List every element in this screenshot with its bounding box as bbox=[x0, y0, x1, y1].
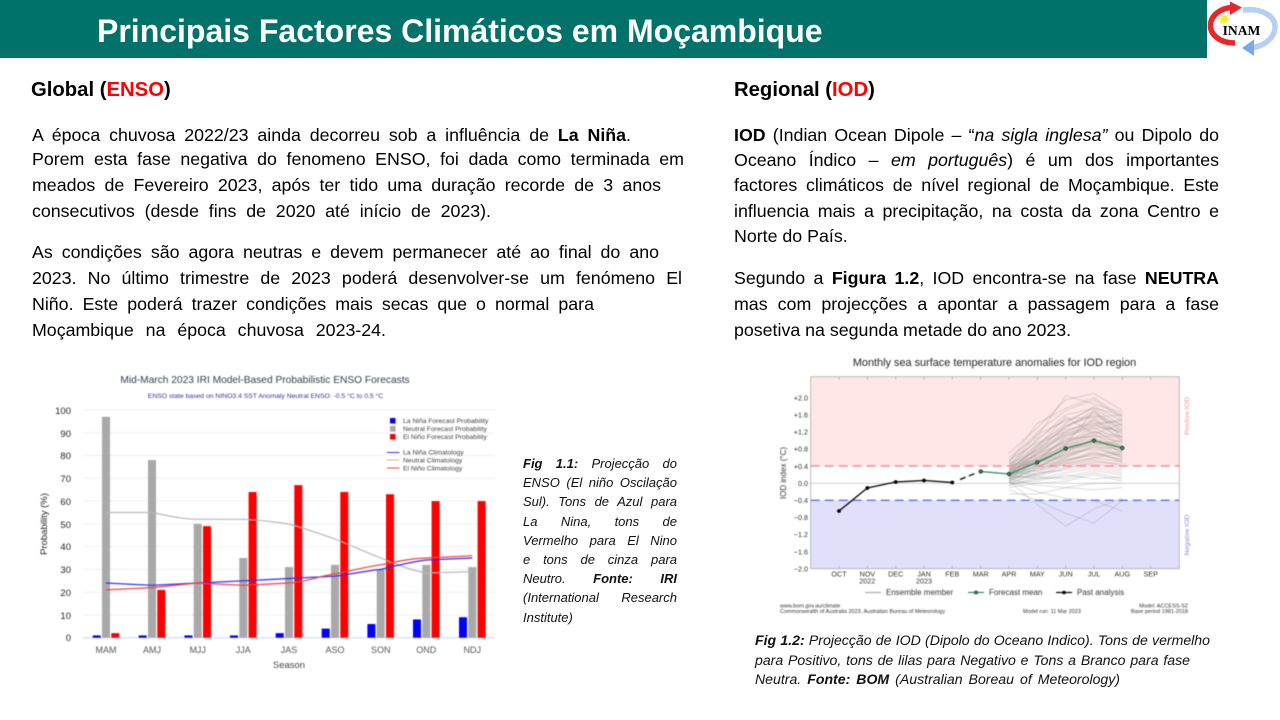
legend: La Niña Forecast Probability bbox=[403, 418, 489, 425]
legend bbox=[387, 418, 489, 472]
caption: Fig 1.1: Sul). Tons de Azul para bbox=[523, 494, 677, 509]
heading: Regional (IOD): Regional (IOD) bbox=[734, 79, 875, 101]
x axis labels: NOV bbox=[860, 570, 875, 578]
y axis labels: −1.2 bbox=[794, 530, 808, 539]
source notes: Base period 1981-2018 bbox=[1131, 609, 1188, 615]
y axis labels: 10 bbox=[60, 611, 71, 622]
x axis labels: AMJ bbox=[143, 645, 161, 655]
source notes: www.bom.gov.au/climate bbox=[779, 604, 840, 610]
legend: Neutral Climatology bbox=[403, 458, 463, 464]
y axis labels: 90 bbox=[60, 429, 71, 440]
x axis labels: AUG bbox=[1115, 570, 1130, 578]
icon: INAM logo: INAM bbox=[1223, 23, 1261, 38]
x axis labels: MJJ bbox=[189, 645, 206, 655]
x axis title: Season bbox=[273, 660, 305, 671]
caption: Fig 1.1: Neutro. Fonte: IRI bbox=[523, 571, 677, 586]
y axis labels: +1.2 bbox=[794, 428, 808, 437]
chart title: Mid-March 2023 IRI Model-Based Probabilistic ENSO Forecasts bbox=[120, 375, 410, 386]
legend: Ensemble member bbox=[886, 588, 953, 597]
legend: Forecast mean bbox=[989, 588, 1042, 597]
text block: ENSO paragraph 1: A época chuvosa 2022/23 ainda decorreu sob a influência de La Niña. bbox=[32, 125, 631, 145]
caption: Fig 1.1: (International Research bbox=[523, 590, 677, 605]
x axis labels: JJA bbox=[236, 645, 251, 655]
caption: Fig 1.1: ENSO (El niño Oscilação bbox=[523, 475, 677, 490]
legend bbox=[865, 588, 1124, 597]
x axis labels: NDJ bbox=[464, 645, 481, 655]
x axis labels: JAN bbox=[917, 570, 931, 578]
x axis labels bbox=[96, 645, 481, 655]
text block: ENSO paragraph 2: Niño. Este poderá trazer condições mais secas que o normal para bbox=[32, 294, 594, 314]
y axis labels: +1.6 bbox=[794, 410, 808, 420]
heading: Global (ENSO): Global (ENSO) bbox=[31, 79, 171, 101]
text block: IOD paragraph 1 bbox=[734, 125, 1219, 246]
y axis labels bbox=[794, 393, 808, 573]
caption: Fig 1.1 bbox=[523, 456, 678, 625]
y axis title: IOD index (°C) bbox=[779, 447, 788, 499]
y axis labels: 50 bbox=[60, 520, 71, 531]
source notes: Commonwealth of Australia 2023, Australian Bureau of Meteorology bbox=[780, 609, 945, 615]
caption: Fig 1.1: e tons de cinza para bbox=[523, 552, 677, 567]
text block: IOD paragraph 2: mas com projecções a apontar a passagem para a fase bbox=[734, 294, 1219, 314]
x axis labels: ASO bbox=[325, 645, 345, 655]
caption: Fig 1.1: Fig 1.1: Projecção do bbox=[523, 456, 677, 471]
past analysis line bbox=[837, 473, 976, 513]
y axis labels: 70 bbox=[60, 474, 71, 485]
source notes bbox=[779, 604, 1188, 615]
chart: IOD sea surface temperature anomalies: Negative IOD bbox=[1184, 515, 1191, 555]
y axis labels: −1.6 bbox=[794, 547, 808, 556]
text block: IOD paragraph 1: influencia mais a precipitação, na costa da zona Centro e bbox=[734, 201, 1219, 221]
text block: ENSO paragraph 1: consecutivos (desde fins de 2020 até início de 2023). bbox=[32, 201, 491, 221]
y axis labels: 40 bbox=[60, 542, 71, 553]
x axis labels: JAS bbox=[281, 645, 297, 655]
x axis labels: JUL bbox=[1088, 570, 1100, 578]
x axis labels: OND bbox=[416, 645, 437, 655]
y axis labels: 80 bbox=[60, 451, 71, 462]
x axis labels: MAM bbox=[96, 645, 116, 655]
text block: IOD paragraph 2: Segundo a Figura 1.2, IOD encontra-se na fase NEUTRA bbox=[734, 268, 1219, 288]
y axis title: Probability (%) bbox=[39, 493, 50, 555]
x axis labels: MAR bbox=[973, 570, 989, 578]
caption: Fig 1.1: Vermelho para El Nino bbox=[523, 533, 677, 548]
bars bbox=[93, 417, 486, 638]
y axis labels: 20 bbox=[60, 588, 71, 599]
y axis labels: −0.4 bbox=[794, 496, 808, 505]
caption: Fig 1.1: Institute) bbox=[523, 610, 573, 625]
x axis labels: OCT bbox=[831, 570, 847, 578]
text block: IOD paragraph 2 bbox=[734, 268, 1219, 340]
source notes: Model: ACCESS-S2 bbox=[1139, 604, 1188, 610]
legend: El Niño Climatology bbox=[403, 466, 463, 472]
negative IOD zone bbox=[811, 500, 1179, 569]
tick marks bbox=[839, 377, 1151, 569]
caption: Fig 1.1: La Nina, tons de bbox=[523, 514, 677, 529]
threshold lines bbox=[811, 465, 1179, 467]
y axis labels bbox=[55, 406, 71, 644]
text block: ENSO paragraph 1 bbox=[32, 125, 684, 221]
caption: Fig 1.2 bbox=[754, 632, 1210, 687]
text block: IOD paragraph 2: posetiva na segunda metade do ano 2023. bbox=[734, 320, 1071, 340]
climatology lines bbox=[106, 512, 472, 590]
y axis labels: 30 bbox=[60, 565, 71, 576]
y axis labels: +0.8 bbox=[794, 445, 808, 454]
y axis labels: 0 bbox=[66, 633, 71, 644]
x axis labels: DEC bbox=[888, 570, 903, 578]
caption: Fig 1.2: para Positivo, tons de lilas para Negativo e Tons a Branco para fase bbox=[755, 652, 1190, 668]
forecast mean line bbox=[979, 439, 1124, 476]
text block: ENSO paragraph 2: Moçambique na época chuvosa 2023-24. bbox=[32, 320, 386, 340]
text block: ENSO paragraph 1: Porem esta fase negativa do fenomeno ENSO, foi dada como terminada em bbox=[32, 149, 684, 169]
y axis labels: 60 bbox=[60, 497, 71, 508]
y axis labels: 0.0 bbox=[798, 479, 808, 488]
text block: IOD paragraph 1: Norte do País. bbox=[734, 226, 848, 246]
title: Principais Factores Climáticos em Moçambique bbox=[97, 13, 823, 49]
x axis labels: 2022 bbox=[859, 576, 875, 586]
text block: IOD paragraph 1: Oceano Índico – em português) é um dos importantes bbox=[734, 150, 1219, 170]
legend: Past analysis bbox=[1077, 588, 1124, 597]
x axis labels: SEP bbox=[1144, 570, 1158, 578]
zone labels: Positive IOD bbox=[1184, 397, 1191, 435]
x axis labels: 2023 bbox=[916, 576, 932, 586]
y axis labels: −0.8 bbox=[794, 513, 808, 522]
chart subtitle: ENSO state based on NINO3.4 SST Anomaly Neutral ENSO: -0.5 °C to 0.5 °C bbox=[148, 392, 383, 400]
positive IOD zone bbox=[811, 377, 1179, 466]
x axis labels: FEB bbox=[945, 570, 959, 578]
ensemble members bbox=[1009, 393, 1122, 526]
icon: INAM logo bbox=[1207, 0, 1280, 58]
text block: ENSO paragraph 2: 2023. No último trimestre de 2023 poderá desenvolver-se um fenómeno El bbox=[32, 268, 682, 288]
header band bbox=[0, 0, 1280, 58]
caption: Fig 1.2: Neutra. Fonte: BOM (Australian Boreau of Meteorology) bbox=[755, 671, 1120, 687]
source notes: Model run: 11 Mar 2023 bbox=[1023, 609, 1081, 615]
caption: Fig 1.2: Fig 1.2: Projecção de IOD (Dipolo do Oceano Indico). Tons de vermelho bbox=[755, 632, 1210, 648]
text block: ENSO paragraph 2 bbox=[32, 242, 682, 340]
text block: ENSO paragraph 1: meados de Fevereiro 2023, após ter tido uma duração recorde de 3 anos bbox=[32, 175, 661, 195]
legend: Neutral Forecast Probability bbox=[403, 426, 487, 433]
x axis labels: APR bbox=[1002, 570, 1016, 578]
y axis labels: −2.0 bbox=[794, 564, 808, 573]
y axis labels: +0.4 bbox=[794, 462, 808, 471]
x axis labels: JUN bbox=[1059, 570, 1073, 578]
y axis labels: 100 bbox=[55, 406, 71, 417]
y axis labels: +2.0 bbox=[794, 393, 808, 402]
x axis labels: MAY bbox=[1030, 570, 1045, 578]
text block: IOD paragraph 1: IOD (Indian Ocean Dipole – “na sigla inglesa” ou Dipolo do bbox=[734, 125, 1219, 145]
x axis labels: SON bbox=[371, 645, 390, 655]
chart title: Monthly sea surface temperature anomalies for IOD region bbox=[853, 357, 1136, 369]
chart: IOD sea surface temperature anomalies bbox=[779, 357, 1191, 615]
x axis labels bbox=[831, 570, 1158, 586]
text block: ENSO paragraph 2: As condições são agora neutras e devem permanecer até ao final do ano bbox=[32, 242, 659, 262]
text block: IOD paragraph 1: factores climáticos de nível regional de Moçambique. Este bbox=[734, 175, 1219, 195]
legend: La Niña Climatology bbox=[403, 450, 464, 456]
legend: El Niño Forecast Probability bbox=[403, 434, 487, 441]
chart: ENSO probabilistic forecast bars bbox=[39, 374, 496, 671]
